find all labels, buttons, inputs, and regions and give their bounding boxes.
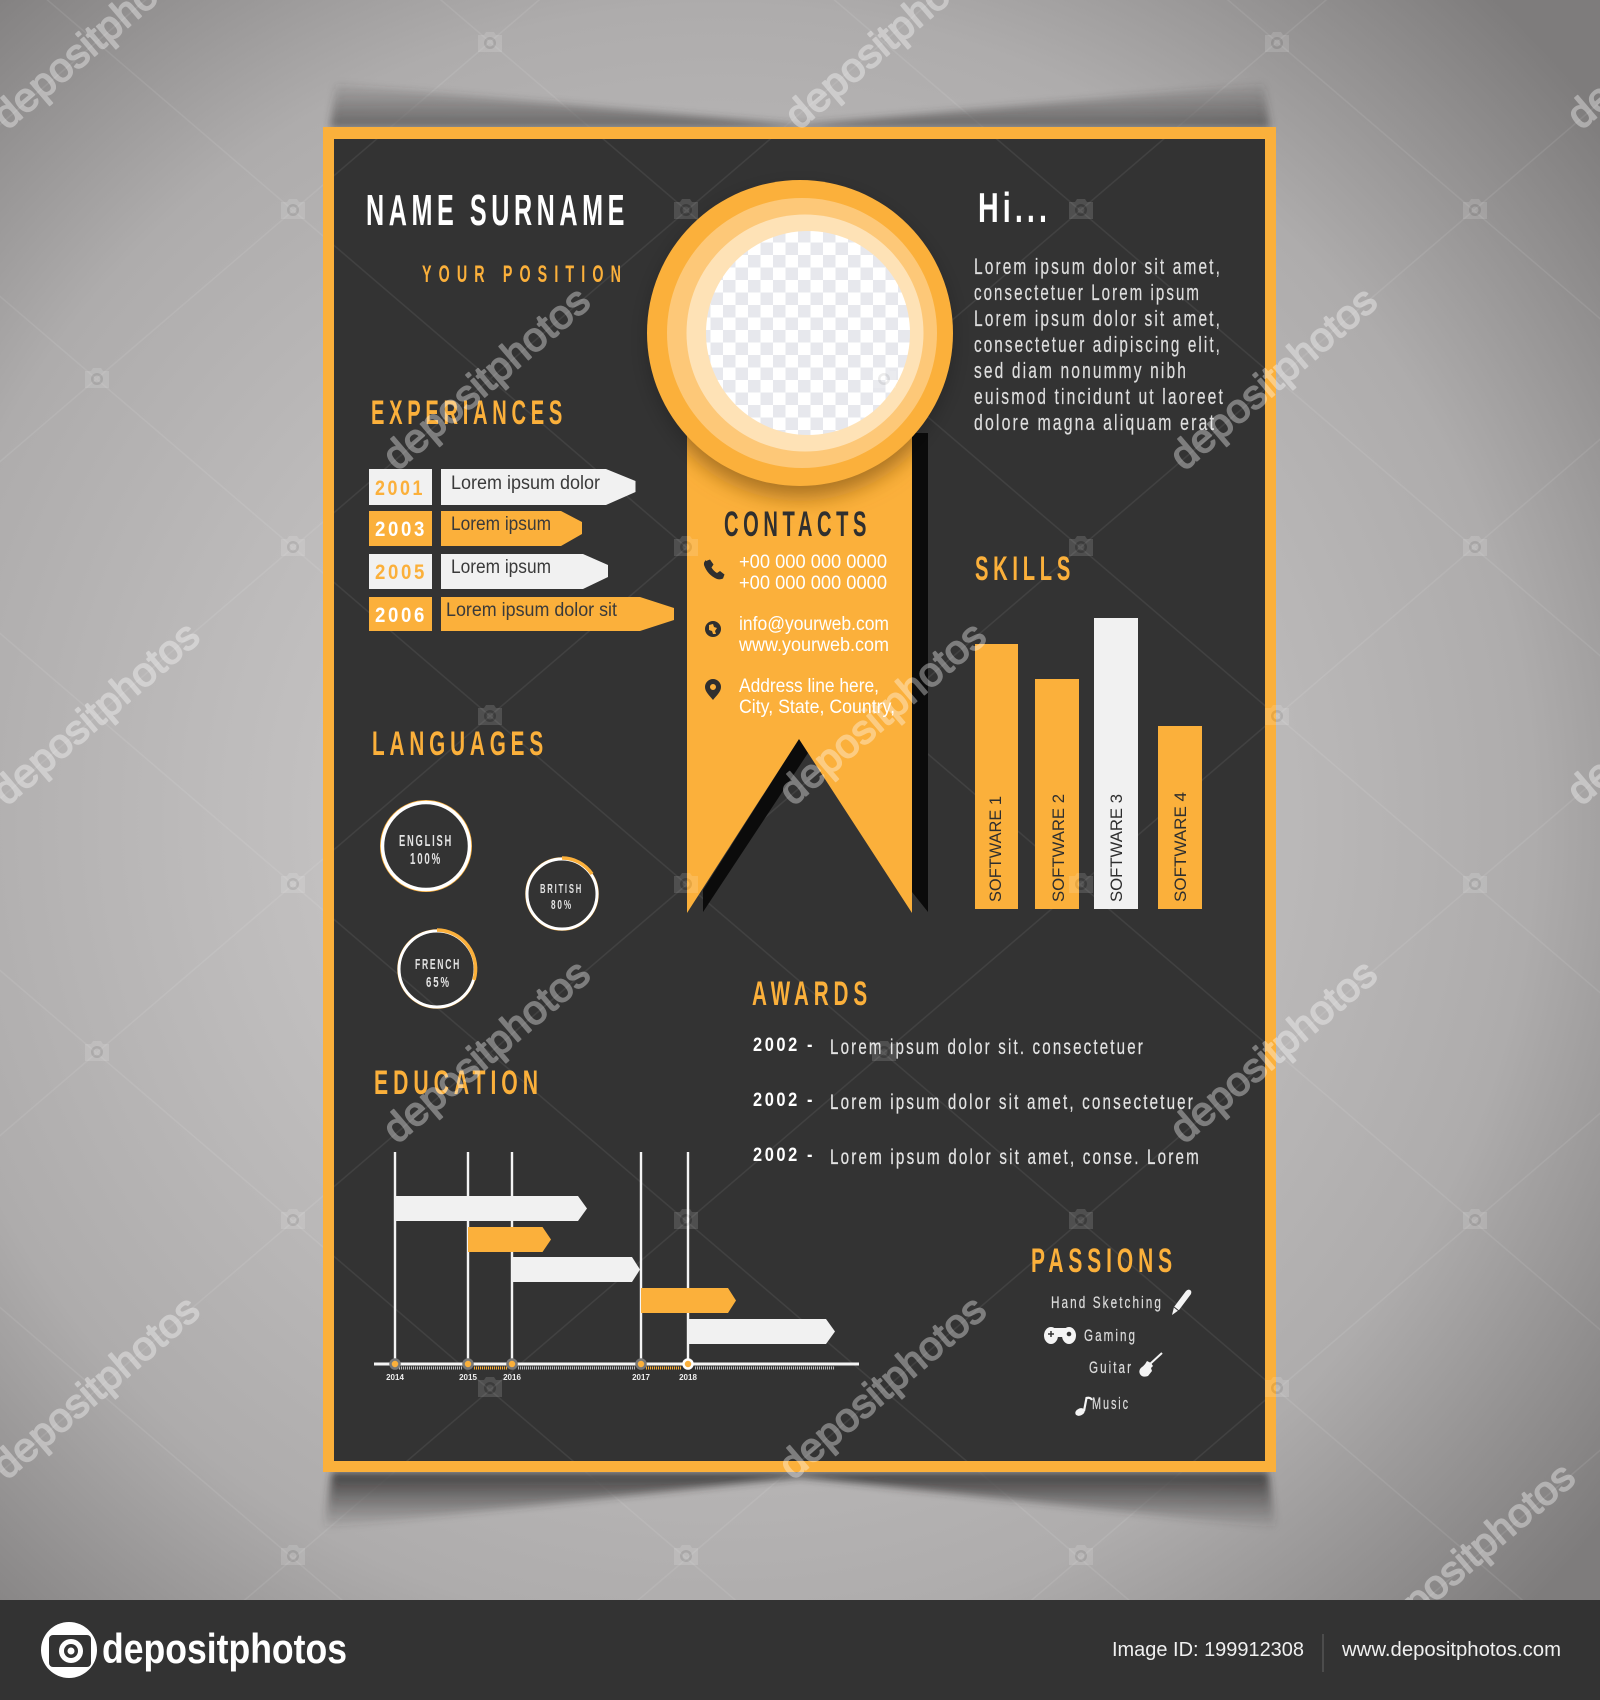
poster panel (334, 139, 1265, 1461)
position: YOUR POSITION (422, 261, 628, 288)
image id: Image ID: 199912308 (1112, 1639, 1304, 1661)
watermarks: depositphotos (770, 613, 994, 814)
icon: gamepad (1044, 1327, 1076, 1344)
icon: guitar (1139, 1353, 1162, 1377)
bar: software 4: SOFTWARE 4 (1171, 792, 1190, 902)
bar: software 1 (975, 644, 1018, 909)
footer bar (0, 1600, 1600, 1700)
bar: software 2 (1035, 679, 1079, 909)
poster frame (323, 127, 1276, 1472)
watermarks: depositphotos (1161, 951, 1385, 1152)
timeline years: 2018 (679, 1373, 697, 1382)
experience row 2001: Lorem ipsum dolor (451, 473, 601, 494)
experience list (369, 469, 674, 631)
intro paragraph (974, 254, 1225, 435)
intro paragraph: dolore magna aliquam erat (974, 410, 1216, 435)
passions list: Hand Sketching (1051, 1293, 1163, 1312)
icon: pin (705, 679, 721, 700)
contact ribbon (687, 436, 912, 913)
heading: languages: LANGUAGES (372, 725, 548, 763)
timeline axis (374, 1360, 859, 1368)
intro paragraph: euismod tincidunt ut laoreet (974, 384, 1225, 409)
circle shadow on ribbon (687, 436, 912, 508)
contact: address: Address line here, (739, 676, 879, 697)
heading: contacts: CONTACTS (724, 505, 871, 544)
education timeline (374, 1152, 859, 1382)
intro paragraph: consectetuer Lorem ipsum (974, 280, 1201, 305)
heading: experiences: EXPERIANCES (371, 394, 567, 432)
timeline years (386, 1373, 697, 1382)
bar: software 1: SOFTWARE 1 (986, 796, 1005, 902)
contact: web (705, 614, 889, 656)
ring: british (526, 858, 598, 930)
poster shadow bottom (324, 1472, 1276, 1528)
ring: british: BRITISH (540, 881, 583, 896)
passions list: Guitar (1089, 1358, 1133, 1377)
passions list: Gaming (1084, 1326, 1137, 1345)
heading: skills: SKILLS (975, 550, 1075, 588)
watermark cameras (85, 32, 1487, 1565)
contact: phone: +00 000 000 0000 (739, 552, 887, 573)
contact: address: City, State, Country, (739, 697, 895, 718)
ring: english: 100% (410, 851, 442, 868)
timeline years: 2014 (386, 1373, 404, 1382)
bar: software 3 (1094, 618, 1138, 909)
portrait medallion (647, 180, 953, 493)
ring: english (381, 801, 471, 891)
skills bar chart (975, 618, 1202, 909)
heading: awards: AWARDS (752, 975, 872, 1013)
ring: french: 65% (426, 974, 451, 991)
icon: globe (705, 621, 721, 637)
awards list (753, 1035, 1201, 1169)
experience row 2006: Lorem ipsum dolor sit (446, 600, 618, 621)
intro paragraph: Lorem ipsum dolor sit amet, (974, 306, 1222, 331)
awards list: Lorem ipsum dolor sit amet, consectetuer (830, 1091, 1195, 1114)
experience row 2003: 2003 (375, 518, 427, 541)
website: www.depositphotos.com (1341, 1639, 1561, 1661)
experience row 2006 (369, 597, 674, 631)
icon: pencil (1172, 1290, 1191, 1315)
experience row 2005: 2005 (375, 561, 427, 584)
footer logo (41, 1622, 347, 1678)
experience row 2006: 2006 (375, 604, 427, 627)
timeline verticals (395, 1152, 688, 1364)
language rings (381, 801, 598, 1008)
heading: education: EDUCATION (374, 1064, 543, 1102)
greeting: Hi... (978, 184, 1051, 231)
experience row 2001: 2001 (375, 477, 425, 500)
ring: english: ENGLISH (399, 833, 453, 850)
experience row 2005: Lorem ipsum (451, 557, 551, 578)
experience row 2003: Lorem ipsum (451, 514, 551, 535)
awards list: 2002 - (753, 1035, 815, 1056)
passions list: Music (1092, 1394, 1130, 1413)
ring: french (398, 930, 476, 1008)
bar: software 3: SOFTWARE 3 (1107, 794, 1126, 902)
contact: web: info@yourweb.com (739, 614, 889, 635)
contact: phone: +00 000 000 0000 (739, 573, 887, 594)
ring: french: FRENCH (415, 956, 461, 973)
awards list: Lorem ipsum dolor sit. consectetuer (830, 1036, 1145, 1059)
name: NAME SURNAME (366, 186, 629, 235)
contact: address (705, 676, 895, 718)
footer logo: depositphotos (102, 1625, 347, 1672)
intro paragraph: consectetuer adipiscing elit, (974, 332, 1222, 357)
watermarks: depositphotos (374, 278, 598, 479)
bar: software 2: SOFTWARE 2 (1049, 794, 1068, 902)
photo placeholder (706, 231, 910, 435)
awards list: Lorem ipsum dolor sit amet, conse. Lorem (830, 1146, 1201, 1169)
contact: phone (704, 552, 887, 594)
watermarks: depositphotos (770, 1287, 994, 1488)
experience row 2001 (369, 469, 636, 505)
intro paragraph: Lorem ipsum dolor sit amet, (974, 254, 1222, 279)
passions list (1044, 1290, 1191, 1417)
timeline bars (395, 1196, 835, 1344)
timeline years: 2017 (632, 1373, 650, 1382)
watermarks: depositphotos (1161, 278, 1385, 479)
ribbon notch shadow (703, 739, 808, 912)
watermarks: depositphotos (374, 951, 598, 1152)
bar: software 4 (1158, 726, 1202, 909)
watermarks: depositphotos (1359, 1454, 1583, 1655)
heading: passions: PASSIONS (1031, 1242, 1177, 1280)
timeline years: 2016 (503, 1373, 521, 1382)
ribbon shadow strip (912, 433, 928, 912)
timeline years: 2015 (459, 1373, 477, 1382)
poster shadow top (330, 84, 1270, 128)
experience row 2005 (369, 554, 608, 589)
awards list: 2002 - (753, 1090, 815, 1111)
icon: phone (704, 560, 724, 579)
icon: music note (1074, 1398, 1092, 1417)
awards list: 2002 - (753, 1145, 815, 1166)
intro paragraph: sed diam nonummy nibh (974, 358, 1188, 383)
ring: british: 80% (551, 897, 573, 912)
contact: web: www.yourweb.com (738, 635, 889, 656)
experience row 2003 (369, 511, 582, 546)
